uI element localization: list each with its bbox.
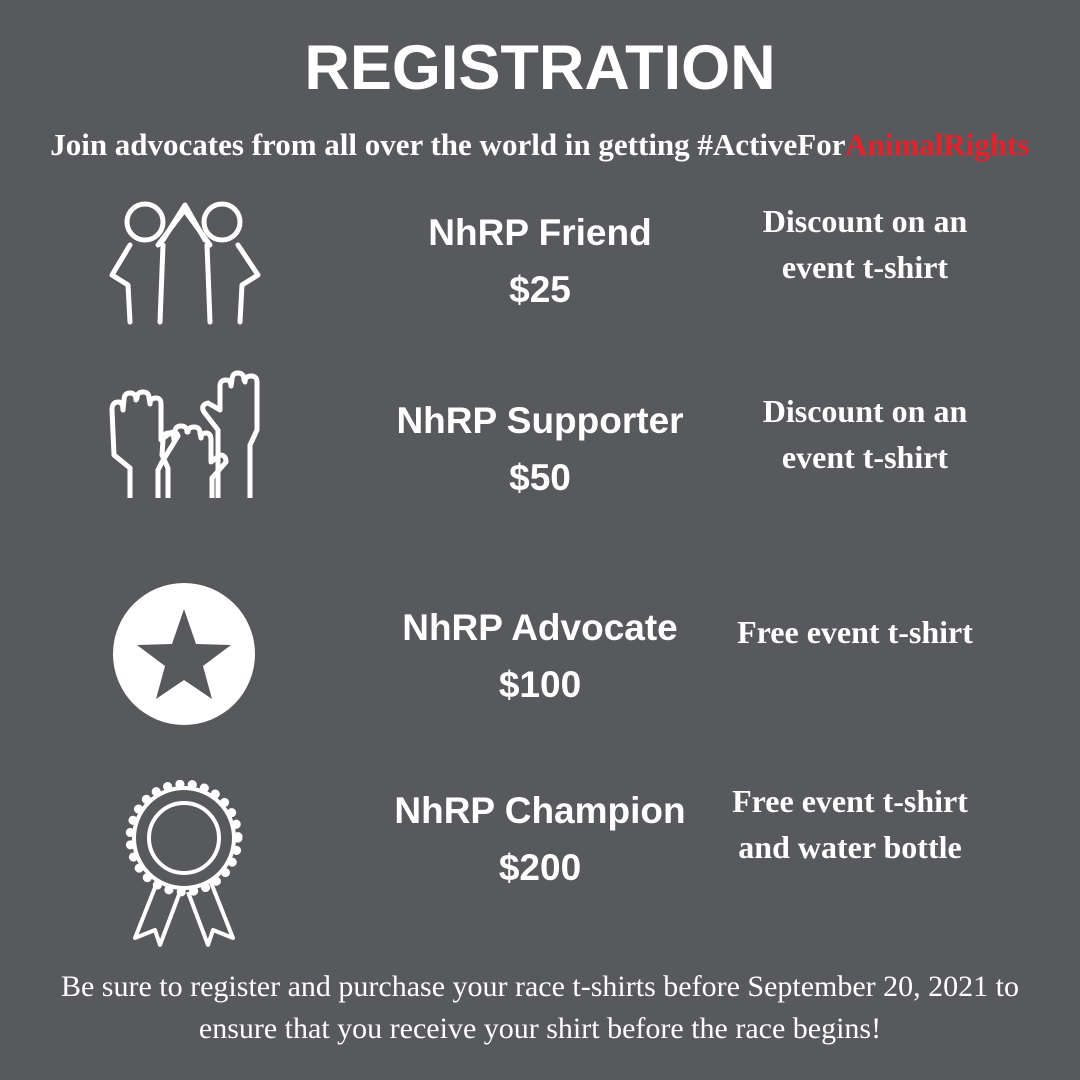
tier: champion: NhRP Champion: [394, 790, 686, 831]
desc: champion: and water bottle: [738, 829, 962, 865]
desc: advocate: Free event t-shirt: [737, 614, 973, 650]
desc: champion: Free event t-shirt: [732, 783, 968, 819]
tier: friend: [428, 212, 652, 310]
tier: advocate: NhRP Advocate: [402, 607, 678, 648]
icon: star circle: [113, 583, 255, 725]
footer note: Be sure to register and purchase your race t-shirts before September 20, 2021 to: [61, 970, 1019, 1003]
tier: friend: NhRP Friend: [428, 212, 652, 253]
tier: supporter: NhRP Supporter: [396, 400, 684, 441]
desc: friend: [763, 203, 967, 285]
tier: advocate: $100: [499, 664, 581, 705]
desc: supporter: [763, 393, 967, 475]
icon: friends high five: [110, 202, 260, 324]
tier: supporter: $50: [509, 457, 571, 498]
footer note: ensure that you receive your shirt before the race begins!: [199, 1012, 881, 1045]
desc: supporter: Discount on an: [763, 393, 967, 429]
desc: supporter: event t-shirt: [782, 439, 948, 475]
tier: champion: [394, 790, 686, 888]
tier: supporter: [396, 400, 684, 498]
desc: champion: [732, 783, 968, 865]
desc: friend: event t-shirt: [782, 249, 948, 285]
title: REGISTRATION: [304, 33, 776, 103]
tier: friend: $25: [509, 269, 571, 310]
footer note: [61, 970, 1019, 1045]
icon: raised hands: [110, 370, 260, 498]
tier: advocate: [402, 607, 678, 705]
icon: award rosette: [126, 780, 242, 947]
tier: champion: $200: [499, 847, 581, 888]
desc: friend: Discount on an: [763, 203, 967, 239]
subtitle: Join advocates from all over the world in getting #ActiveForAnimalRights: [50, 127, 1030, 162]
